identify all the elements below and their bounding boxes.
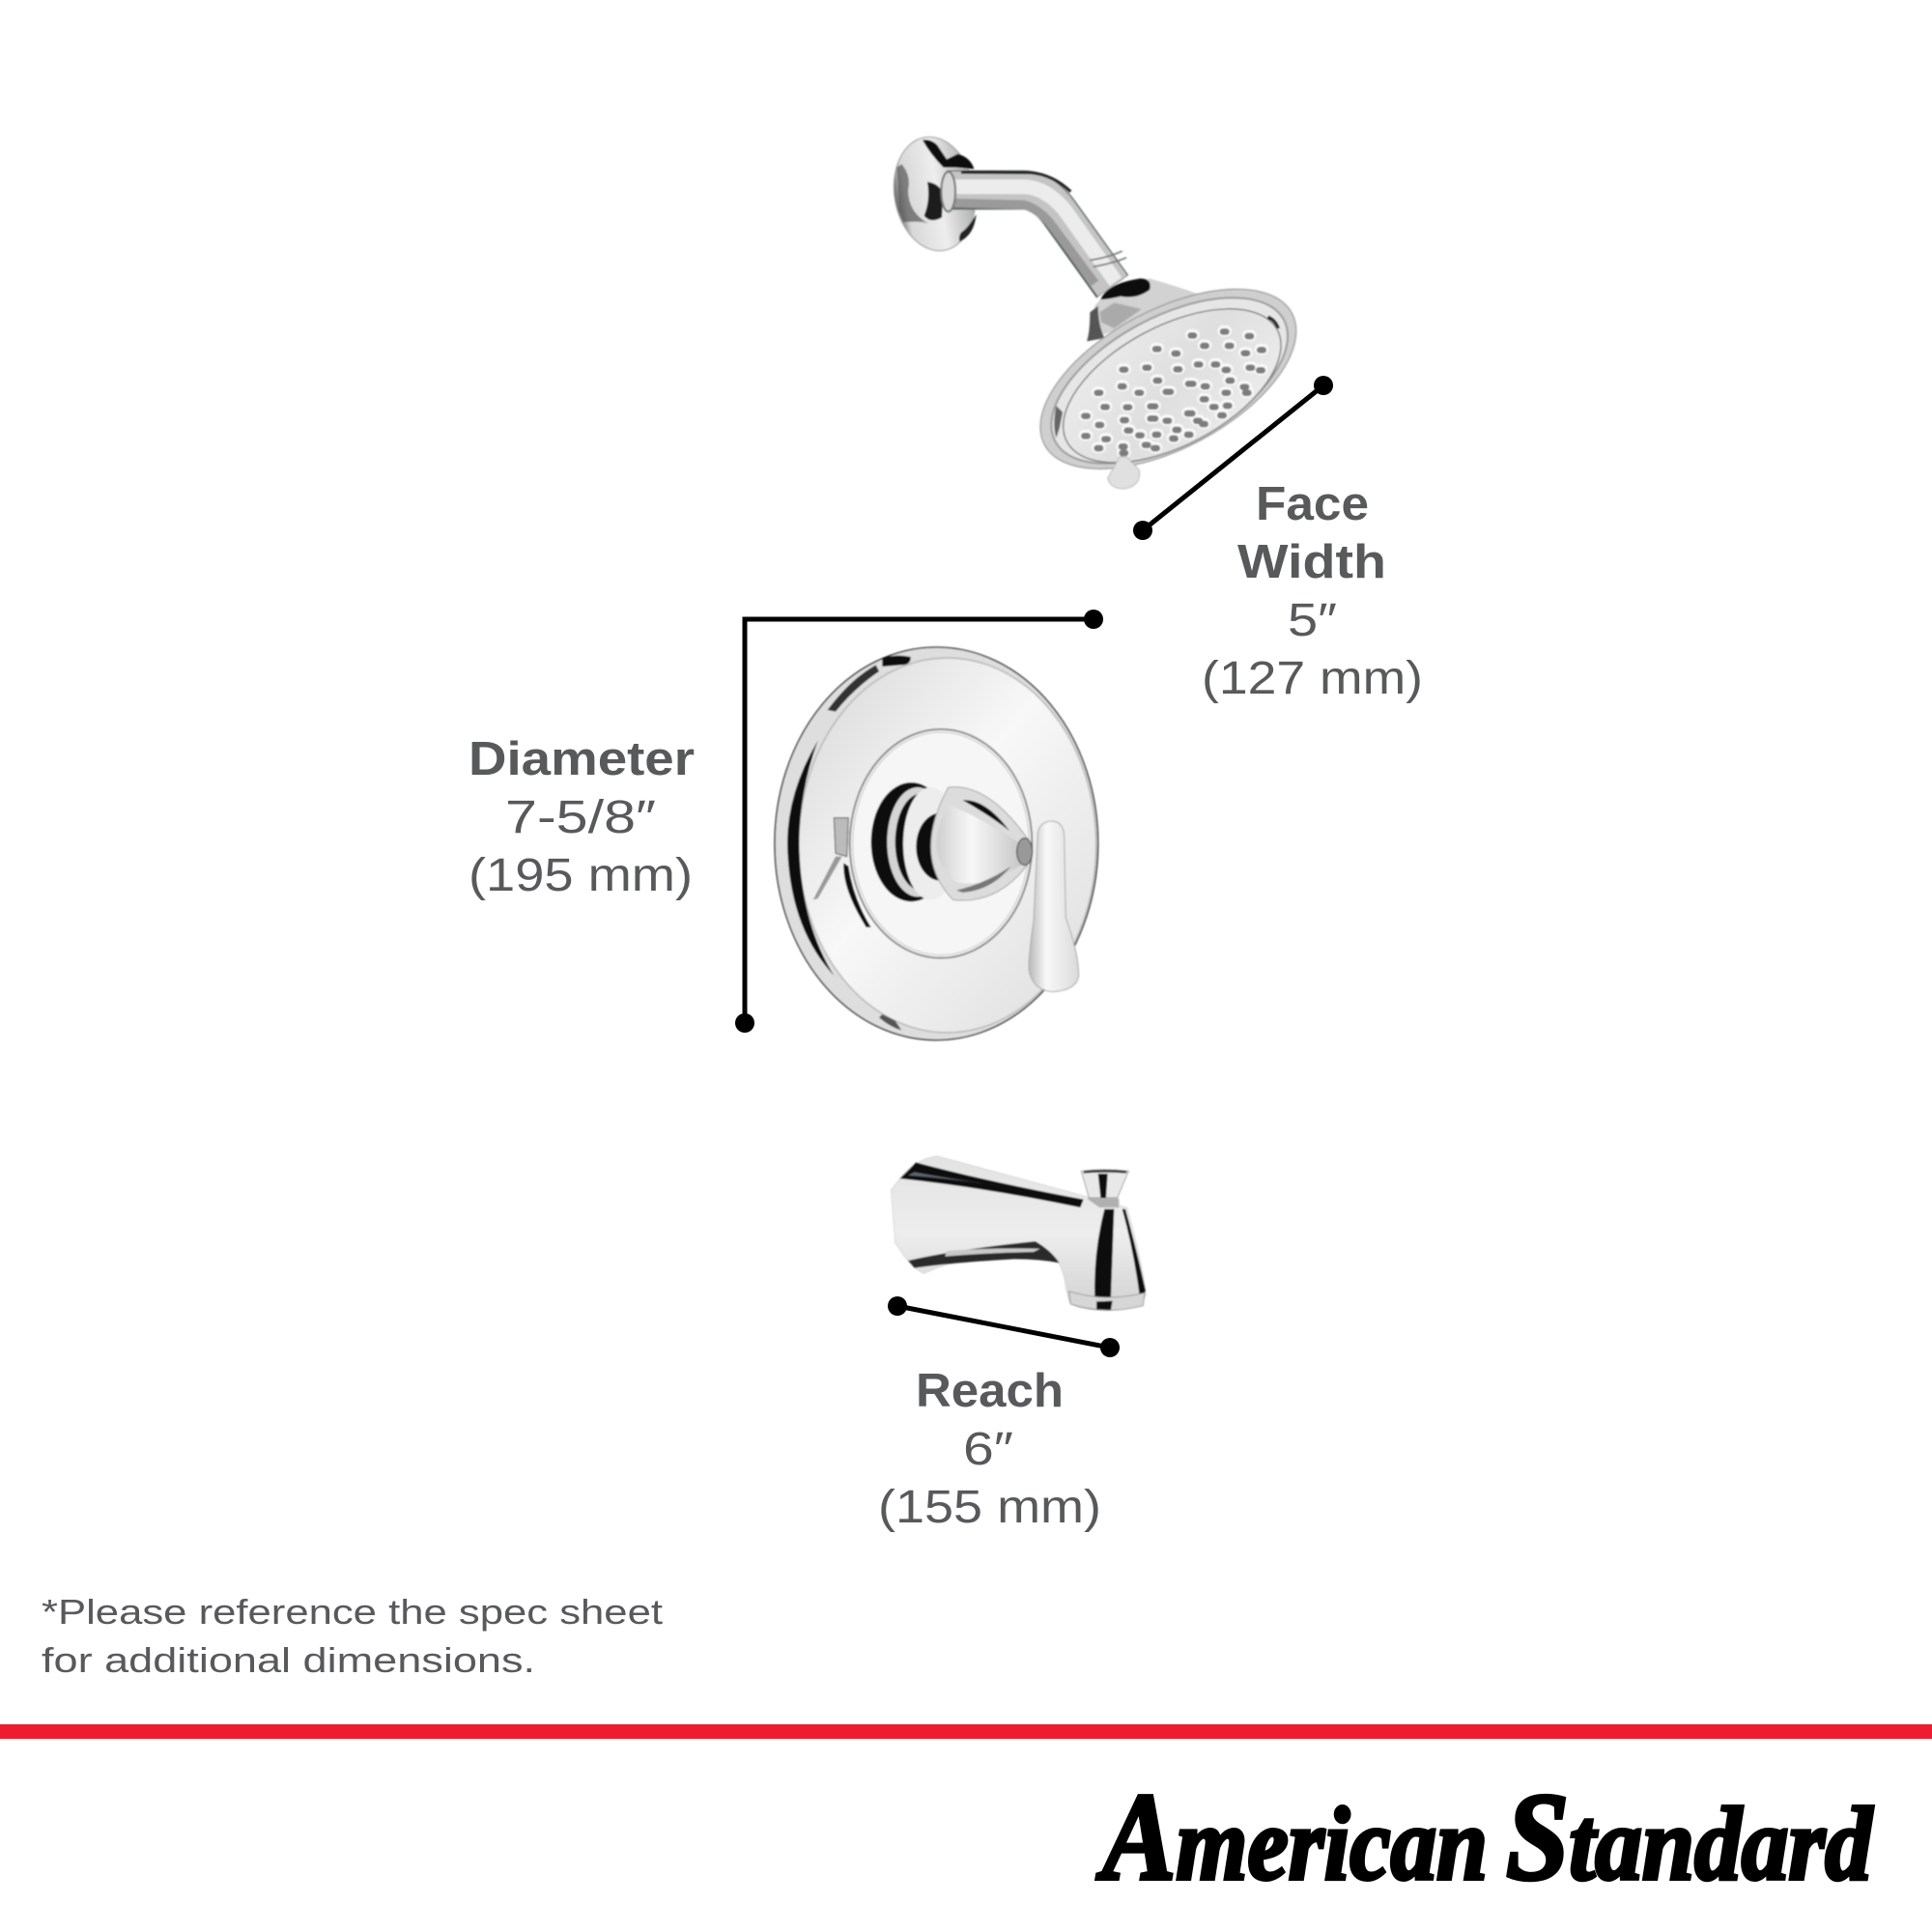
label: face width: (127 mm) — [1202, 653, 1423, 704]
product image: valve trim plate and handle — [775, 647, 1098, 1040]
head face with spray nozzles — [1012, 252, 1324, 506]
label: diameter: 7-5/8″ — [505, 792, 656, 843]
outer rim — [775, 647, 1098, 1040]
spray selector lever — [1108, 457, 1140, 489]
label: face width: Face — [1256, 478, 1369, 530]
label: reach: Reach — [916, 1365, 1064, 1417]
label: reach: 6″ — [963, 1424, 1013, 1475]
brand logo — [1096, 1768, 1874, 1907]
label: reach: (155 mm) — [878, 1482, 1101, 1533]
dimension line: reach — [888, 1296, 1120, 1357]
lever handle — [1029, 821, 1079, 992]
inner collar ring — [813, 729, 1032, 958]
spout body — [891, 1156, 1146, 1311]
valve hub and cone — [871, 782, 1033, 901]
dimension line: face width — [1133, 376, 1333, 540]
label: reach — [878, 1365, 1101, 1533]
footnote — [42, 1592, 663, 1680]
label: face width — [1202, 478, 1423, 704]
wall flange — [885, 130, 983, 257]
head neck — [1087, 278, 1205, 341]
brand logo: American — [1096, 1768, 1488, 1907]
label: diameter: (195 mm) — [469, 850, 693, 901]
footnote: *Please reference the spec sheet — [42, 1592, 663, 1632]
label: diameter: Diameter — [469, 733, 695, 785]
product image: tub spout — [891, 1156, 1146, 1311]
brand logo: Standard — [1506, 1768, 1874, 1907]
red divider bar — [0, 1724, 1932, 1739]
footnote: for additional dimensions. — [42, 1640, 535, 1680]
product image: shower head and arm — [885, 130, 1324, 506]
label: diameter — [469, 733, 695, 901]
dimension line: diameter — [735, 610, 1103, 1033]
shower arm — [941, 172, 1126, 287]
diverter cap — [1081, 1170, 1128, 1208]
label: face width: Width — [1237, 536, 1386, 588]
label: face width: 5″ — [1288, 595, 1337, 646]
